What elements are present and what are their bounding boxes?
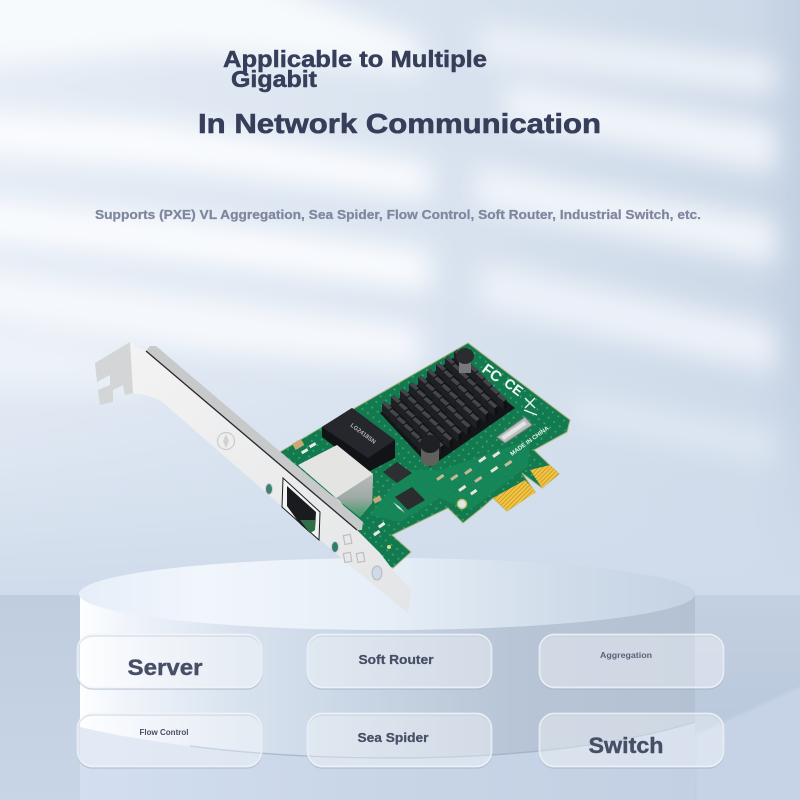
ic chips (383, 462, 425, 513)
pcb board (280, 343, 570, 568)
product: gigabit network card (95, 342, 570, 613)
heading line 2: Gigabit (231, 66, 317, 92)
card: Aggregation (540, 634, 724, 689)
card: Sea Spider (308, 714, 492, 768)
main heading: In Network Communication (198, 108, 601, 139)
card: Soft Router (308, 634, 492, 689)
crystal oscillator (497, 417, 532, 443)
regulatory marks on board: FC (479, 361, 505, 386)
card: Switch: Switch (588, 733, 664, 758)
regulatory marks on board: CE (501, 375, 526, 399)
podium (79, 558, 695, 800)
card: Aggregation: Aggregation (600, 650, 652, 660)
subtitle: Supports (PXE) VL Aggregation, Sea Spider, Flow Control, Soft Router, Industrial Switch, etc. (95, 208, 701, 222)
gold fingers (493, 465, 559, 511)
transformer chip: LG2418SN (349, 423, 376, 446)
mounting pins (420, 348, 474, 466)
rj45 socket opening (282, 478, 320, 540)
card: Server (78, 634, 262, 689)
floor (0, 595, 800, 800)
card: Soft Router: Soft Router (358, 653, 434, 667)
regulatory marks on board (479, 361, 551, 458)
card: Switch (540, 714, 724, 768)
smd components (292, 439, 512, 549)
rj45 port housing (298, 445, 373, 517)
transformer chip (322, 408, 395, 472)
regulatory marks on board: MADE IN CHINA (510, 425, 551, 458)
card: Flow Control (78, 714, 262, 768)
card: Flow Control: Flow Control (140, 728, 188, 737)
card: Server: Server (128, 655, 203, 680)
heatsink (380, 350, 515, 467)
heading line 1: Applicable to Multiple (223, 46, 487, 72)
card: Sea Spider: Sea Spider (358, 730, 428, 745)
metal bracket (95, 342, 411, 613)
